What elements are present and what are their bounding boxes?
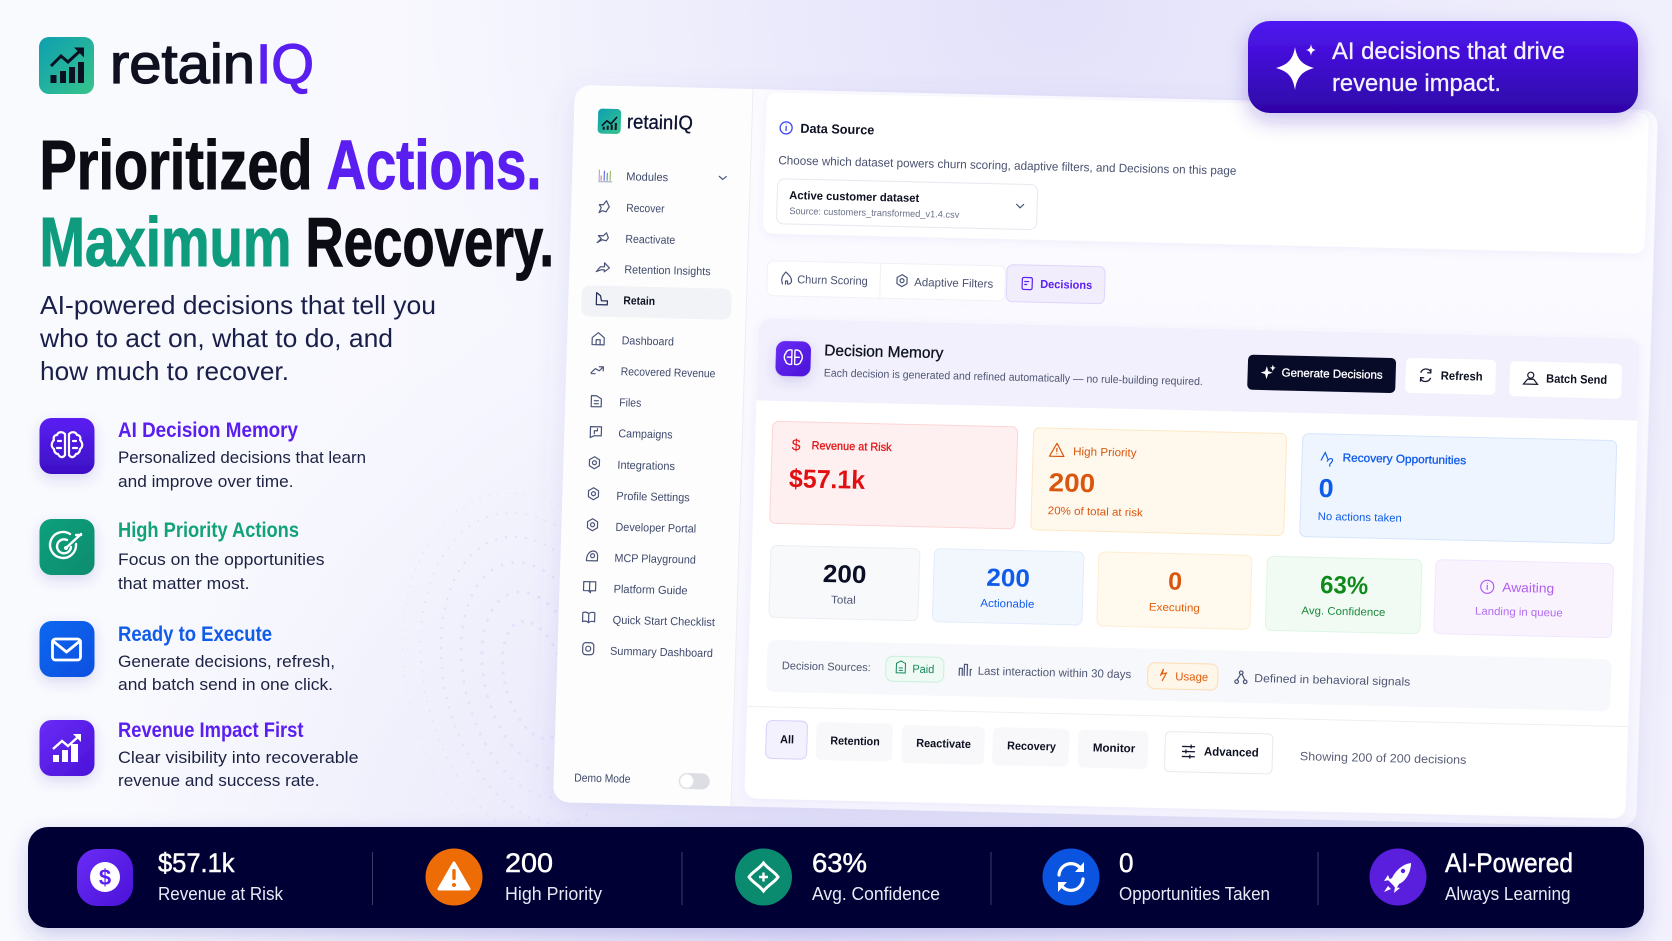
metric: high priority: 200 (505, 848, 553, 878)
navigation list: Dashboard (621, 335, 674, 348)
dropdown (776, 179, 1038, 230)
feature: Revenue Impact First (40, 719, 358, 790)
stat: actionable: Actionable (980, 598, 1035, 611)
heading: AI Decision Memory (118, 419, 298, 442)
logo (39, 32, 314, 95)
navigation list: Campaigns (618, 428, 673, 441)
wordmark (110, 32, 314, 95)
panel: dashboard mockup (553, 85, 1658, 827)
KPI card: high priority (1031, 428, 1287, 536)
filter: recovery: Recovery (1007, 740, 1057, 754)
title (40, 126, 554, 281)
icon: sparkle (1276, 44, 1316, 90)
metric: avg confidence (735, 848, 940, 906)
dropdown: Active customer dataset (789, 190, 920, 205)
heading: Ready to Execute (118, 623, 272, 646)
KPI card: high priority: 20% of total at risk (1048, 505, 1143, 519)
navigation list: MCP Playground (614, 553, 696, 567)
button: advanced: Advanced (1204, 744, 1259, 760)
icon: warning (426, 848, 482, 906)
description: that matter most. (118, 574, 250, 593)
metric: opportunities taken: 0 (1119, 848, 1134, 878)
icon: info (780, 122, 792, 134)
KPI card: high priority: 200 (1048, 467, 1096, 498)
description: Personalized decisions that learn (118, 448, 366, 467)
navigation list: Profile Settings (616, 491, 690, 504)
filter: recovery (992, 727, 1070, 767)
results count: Showing 200 of 200 decisions (1300, 749, 1467, 767)
stat: awaiting: Landing in queue (1475, 606, 1563, 620)
heading: Data Source (800, 121, 875, 137)
panel: bottom metrics strip (28, 827, 1644, 928)
KPI card: revenue at risk: $ (791, 437, 801, 454)
icon: refresh (1042, 848, 1100, 906)
description: Choose which dataset powers churn scoring, adaptive filters, and Decisions on this page (778, 153, 1237, 178)
decision sources bar (766, 640, 1612, 711)
subtitle: who to act on, what to do, and (39, 323, 393, 353)
navigation list: Platform Guide (613, 584, 688, 597)
navigation list: Summary Dashboard (610, 646, 713, 660)
metric: revenue at risk (77, 848, 284, 906)
demo mode label: Demo Mode (574, 772, 631, 786)
icon: brain badge (775, 341, 811, 377)
heading: Decision Memory (824, 342, 944, 362)
stat: executing: Executing (1149, 602, 1200, 615)
panel: sidebar (553, 85, 753, 806)
stat: executing (1097, 552, 1252, 629)
navigation list: Files (619, 397, 642, 410)
navigation list: Quick Start Checklist (612, 615, 716, 629)
navigation list: Retain (623, 295, 655, 308)
navigation list: Integrations (617, 460, 675, 473)
title: Prioritized (40, 126, 312, 204)
stat: awaiting: Awaiting (1502, 580, 1554, 596)
KPI card: recovery opportunities: No actions taken (1318, 511, 1402, 525)
callout (1248, 21, 1638, 113)
KPI card: revenue at risk: $57.1k (789, 463, 866, 495)
tag: paid: Paid (912, 664, 934, 676)
metric: revenue at risk: $57.1k (158, 848, 235, 878)
navigation list: Retention Insights (624, 264, 711, 278)
navigation list: Reactivate (625, 234, 675, 247)
KPI card: recovery opportunities (1300, 433, 1617, 544)
metric: opportunities taken: Opportunities Taken (1119, 884, 1270, 904)
icon: dollar: $ (99, 865, 111, 890)
metric: AI-powered (1370, 848, 1573, 906)
metric: opportunities taken (1042, 848, 1270, 906)
KPI card: recovery opportunities: Recovery Opportunities (1342, 452, 1467, 467)
callout text (1332, 38, 1565, 97)
filter: reactivate (901, 725, 985, 765)
stat: avg confidence (1265, 556, 1422, 634)
description (118, 652, 335, 694)
feature: Ready to Execute (40, 621, 335, 694)
icon: shield target (735, 848, 792, 906)
description (118, 448, 366, 491)
metric: high priority: High Priority (505, 884, 602, 904)
icon: rocket (1370, 848, 1426, 906)
icon: mail (40, 621, 94, 677)
stat: total: Total (831, 594, 856, 607)
button: refresh (1405, 358, 1496, 395)
navigation list: Recover (626, 203, 665, 216)
stat: actionable: 200 (986, 564, 1030, 593)
icon: brain (40, 418, 94, 474)
panel: decision memory (744, 318, 1640, 819)
filter: all (765, 720, 808, 759)
button: generate decisions (1247, 355, 1396, 393)
KPI card: revenue at risk: Revenue at Risk (811, 440, 892, 454)
filter: retention (815, 722, 893, 762)
description (118, 748, 358, 790)
filter: reactivate: Reactivate (916, 738, 971, 751)
stat: avg confidence: Avg. Confidence (1301, 605, 1386, 619)
metric: AI-powered: Always Learning (1445, 884, 1570, 904)
stat: total (769, 545, 920, 621)
callout text: revenue impact. (1332, 70, 1501, 97)
title: Maximum (40, 203, 292, 281)
toggle (678, 773, 710, 790)
tabs (767, 259, 1105, 304)
panel: data source (763, 92, 1649, 254)
stat: total: 200 (822, 560, 867, 589)
description: and improve over time. (118, 472, 294, 491)
description: Each decision is generated and refined automatically — no rule-building required. (824, 367, 1203, 388)
subtitle: AI-powered decisions that tell you (40, 290, 436, 320)
sidebar logo: retainIQ (627, 111, 693, 135)
stat: executing: 0 (1168, 567, 1183, 596)
metric: avg confidence: 63% (812, 848, 867, 878)
highlight: active nav item (581, 285, 732, 320)
stat: actionable (932, 549, 1084, 625)
metric: revenue at risk: Revenue at Risk (158, 884, 284, 904)
title: Actions. (326, 126, 542, 204)
KPI card: high priority: High Priority (1073, 446, 1137, 460)
button: generate decisions: Generate Decisions (1281, 367, 1383, 382)
stat: awaiting (1434, 560, 1614, 638)
tag: usage (1147, 663, 1218, 690)
icon: dollar (77, 849, 133, 906)
wordmark: retain (110, 32, 255, 95)
KPI card: revenue at risk (770, 421, 1018, 529)
navigation list (581, 170, 729, 660)
metric: avg confidence: Avg. Confidence (812, 884, 940, 904)
button: advanced (1164, 732, 1273, 774)
decision sources bar: Defined in behavioral signals (1254, 673, 1411, 689)
feature: High Priority Actions (40, 519, 324, 593)
filter: monitor (1077, 730, 1149, 769)
navigation list: Recovered Revenue (621, 366, 716, 380)
filter: retention: Retention (830, 735, 880, 748)
icon: logo chart (39, 37, 94, 94)
button: batch send: Batch Send (1546, 372, 1607, 387)
stat: avg confidence: 63% (1320, 571, 1369, 600)
filter: monitor: Monitor (1093, 742, 1136, 755)
sidebar logo (598, 109, 693, 136)
heading: High Priority Actions (118, 519, 299, 542)
tabs: Decisions (1040, 279, 1092, 292)
callout text: AI decisions that drive (1332, 38, 1565, 65)
navigation list: Developer Portal (615, 522, 696, 536)
metric: high priority (426, 848, 602, 906)
icon: target (40, 519, 94, 575)
KPI card: recovery opportunities: 0 (1318, 473, 1334, 503)
button: batch send (1509, 361, 1622, 399)
filter: all: All (780, 734, 794, 746)
tag: usage: Usage (1175, 671, 1208, 684)
tag: paid (885, 656, 944, 682)
subtitle: how much to recover. (40, 356, 289, 386)
feature: AI Decision Memory (40, 418, 366, 491)
tabs: Churn Scoring (797, 274, 868, 288)
navigation list: Modules (626, 171, 669, 184)
tabs: Adaptive Filters (914, 277, 994, 291)
wordmark: IQ (256, 32, 314, 95)
dropdown: Source: customers_transformed_v1.4.csv (789, 206, 960, 221)
description: Focus on the opportunities (118, 550, 324, 569)
description: Clear visibility into recoverable (118, 748, 358, 767)
icon: growth chart (40, 720, 94, 776)
description: and batch send in one click. (118, 675, 333, 694)
description: Generate decisions, refresh, (118, 652, 335, 671)
subtitle (39, 290, 436, 386)
heading: Revenue Impact First (118, 719, 304, 742)
metric: AI-powered: AI-Powered (1445, 848, 1573, 878)
description (118, 550, 324, 593)
button: refresh: Refresh (1440, 369, 1483, 384)
decision sources bar: Decision Sources: (782, 660, 871, 674)
title: Recovery. (306, 203, 554, 281)
decision sources bar: Last interaction within 30 days (978, 666, 1132, 681)
description: revenue and success rate. (118, 771, 320, 790)
